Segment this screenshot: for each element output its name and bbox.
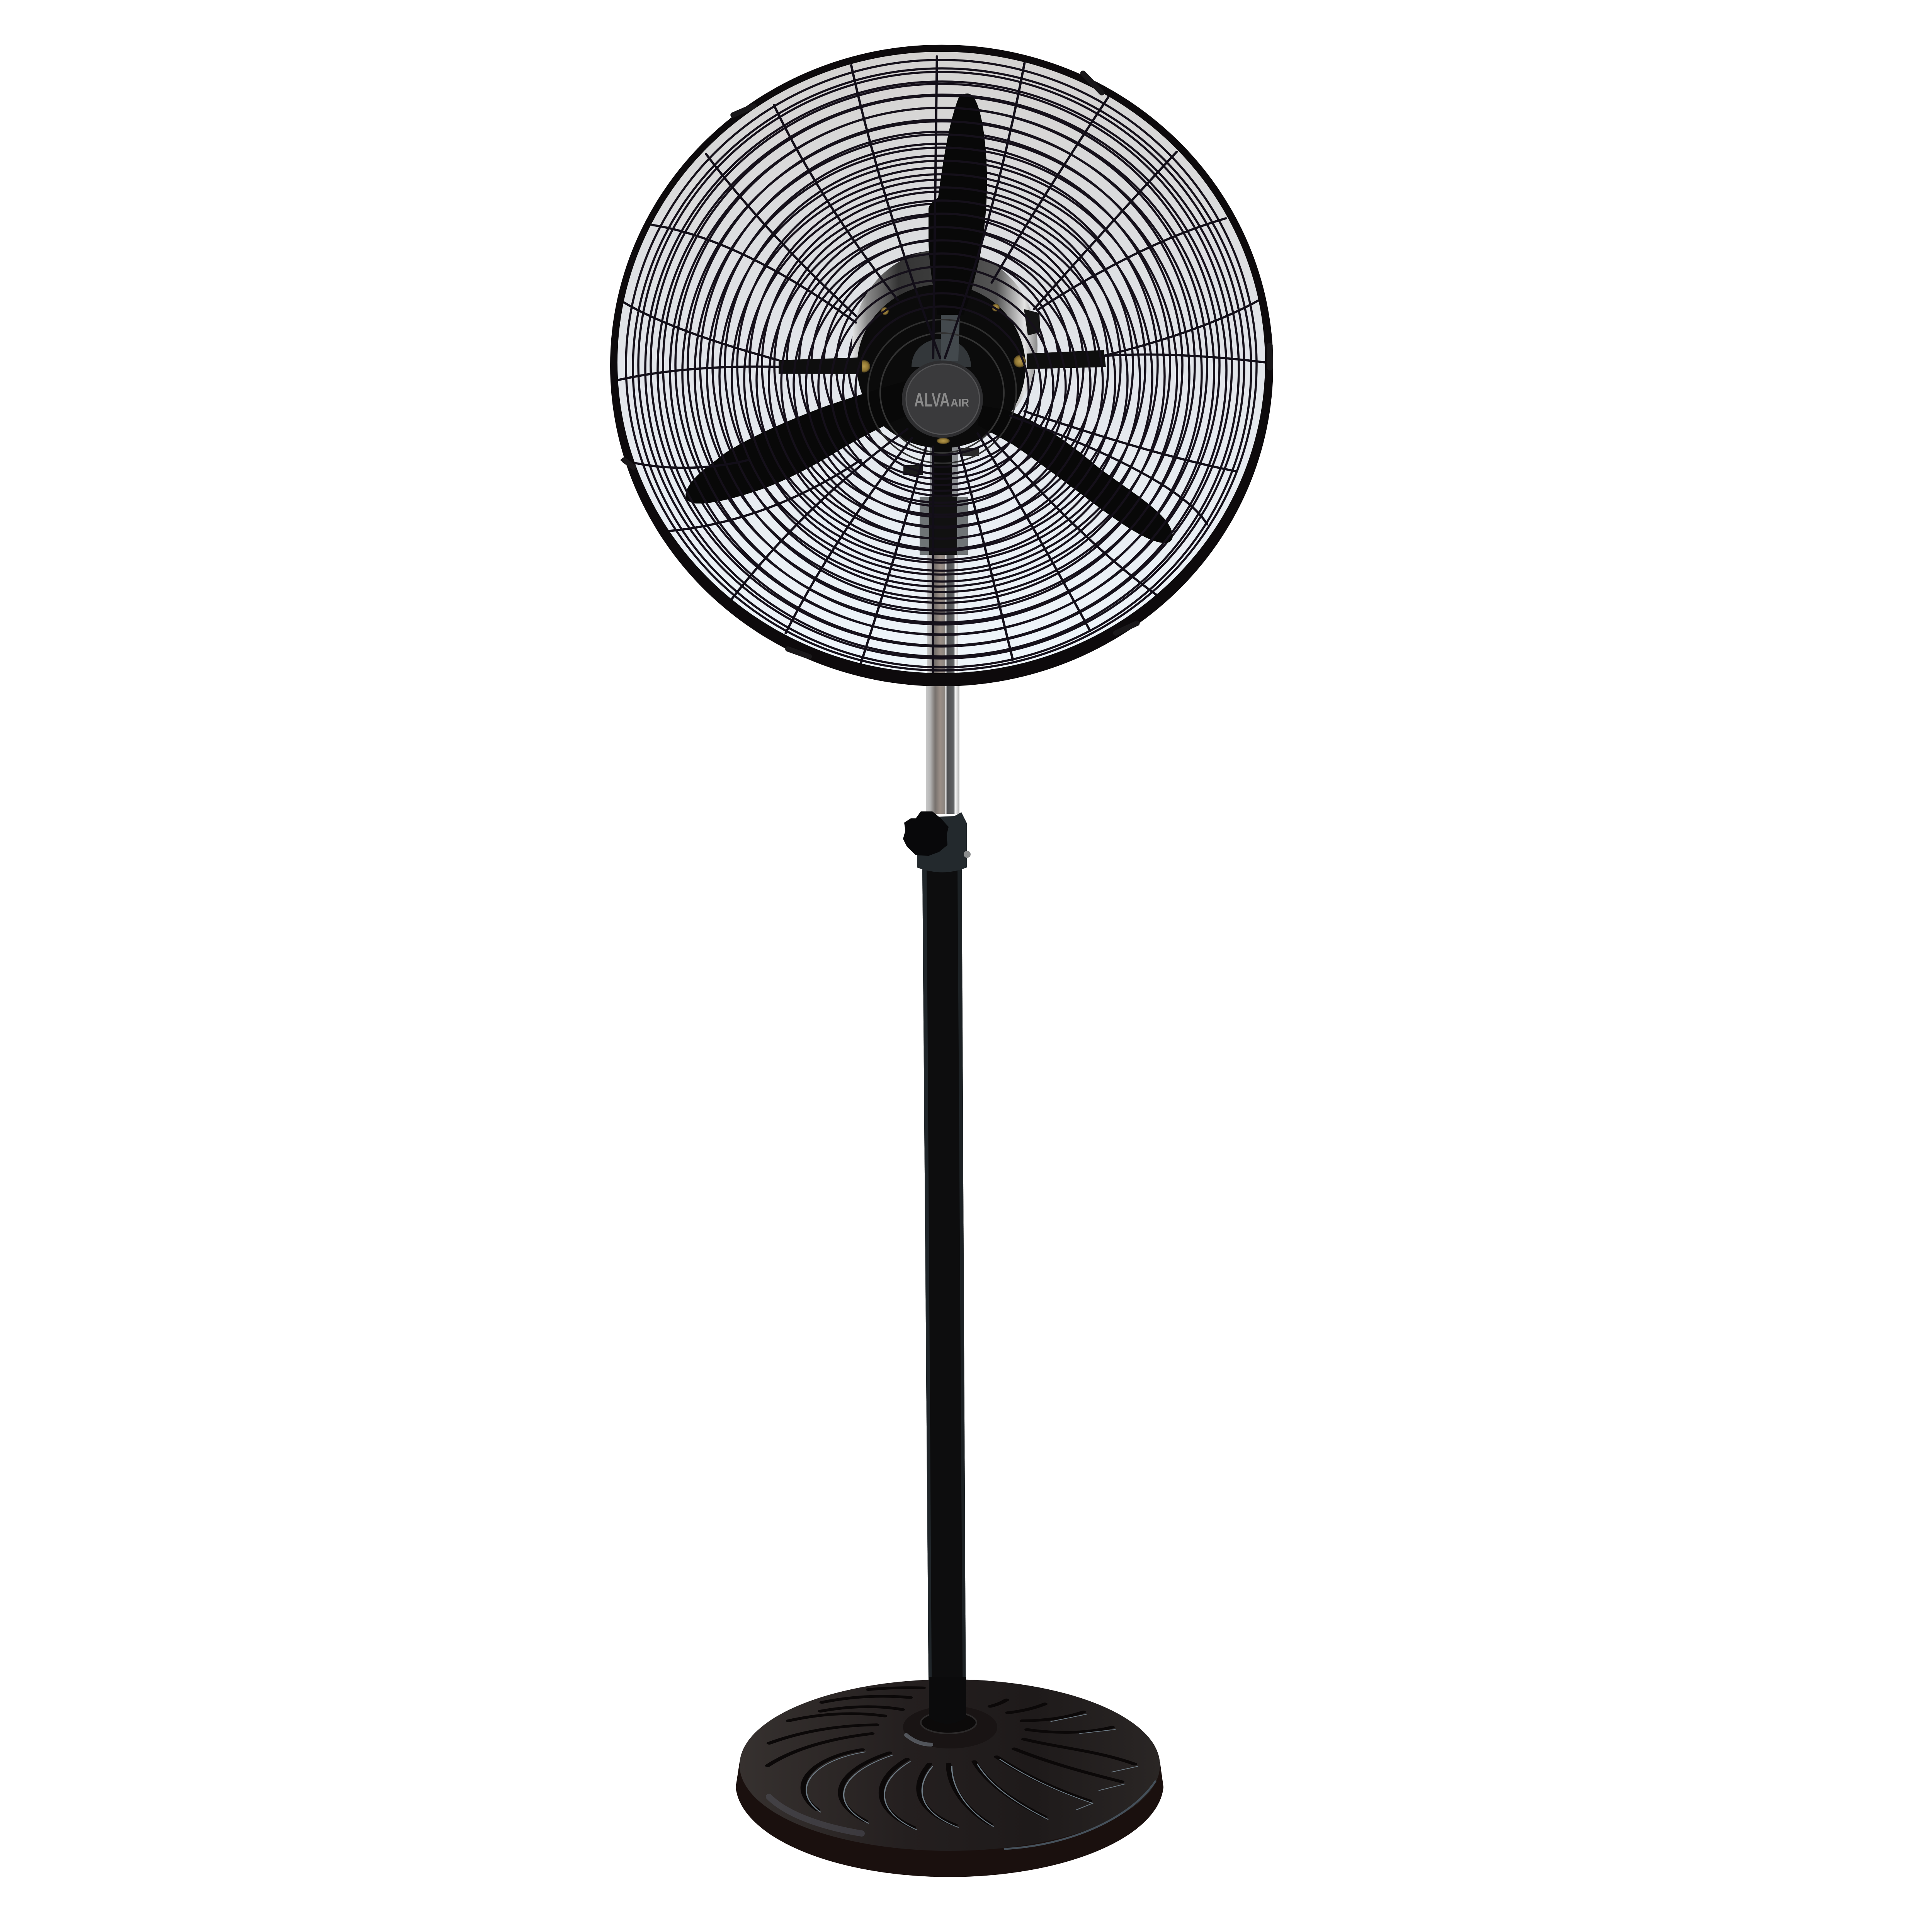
base side wall — [736, 1762, 1163, 1877]
blade mounting arms — [779, 350, 1106, 374]
front guard wire rings — [633, 68, 1251, 667]
blade: top — [929, 94, 987, 315]
hub cap with ALVA AIR logo: AIR — [951, 397, 969, 409]
hub cap with ALVA AIR logo — [902, 361, 983, 438]
rear guard wire rings — [626, 60, 1257, 670]
logo text: ALVA — [914, 389, 950, 411]
height adjustment collar — [917, 812, 971, 872]
lower black pole — [922, 869, 966, 1731]
base top surface — [740, 1679, 1160, 1851]
locking knob — [903, 811, 949, 856]
outer rim — [610, 45, 1273, 686]
blade: right — [978, 406, 1173, 543]
motor bolts — [858, 304, 1026, 444]
fan blades — [685, 94, 1173, 543]
motor housing — [852, 249, 1040, 448]
swirl ridges: shadow — [768, 1688, 1134, 1827]
rim clips — [624, 73, 1270, 656]
chrome neck behind the cage — [903, 444, 979, 703]
cage interior backdrop — [617, 51, 1266, 674]
chrome upper pole — [926, 686, 959, 814]
blade: left — [685, 381, 908, 503]
pole foot — [929, 1677, 966, 1724]
cast iron base — [736, 1677, 1163, 1877]
pole mount boss — [903, 1706, 997, 1748]
rim highlights — [769, 1781, 1155, 1849]
swirl ridges: highlights — [806, 1714, 1138, 1830]
guard spokes — [617, 56, 1266, 677]
infographic: pedestal fan — [610, 45, 1273, 1877]
